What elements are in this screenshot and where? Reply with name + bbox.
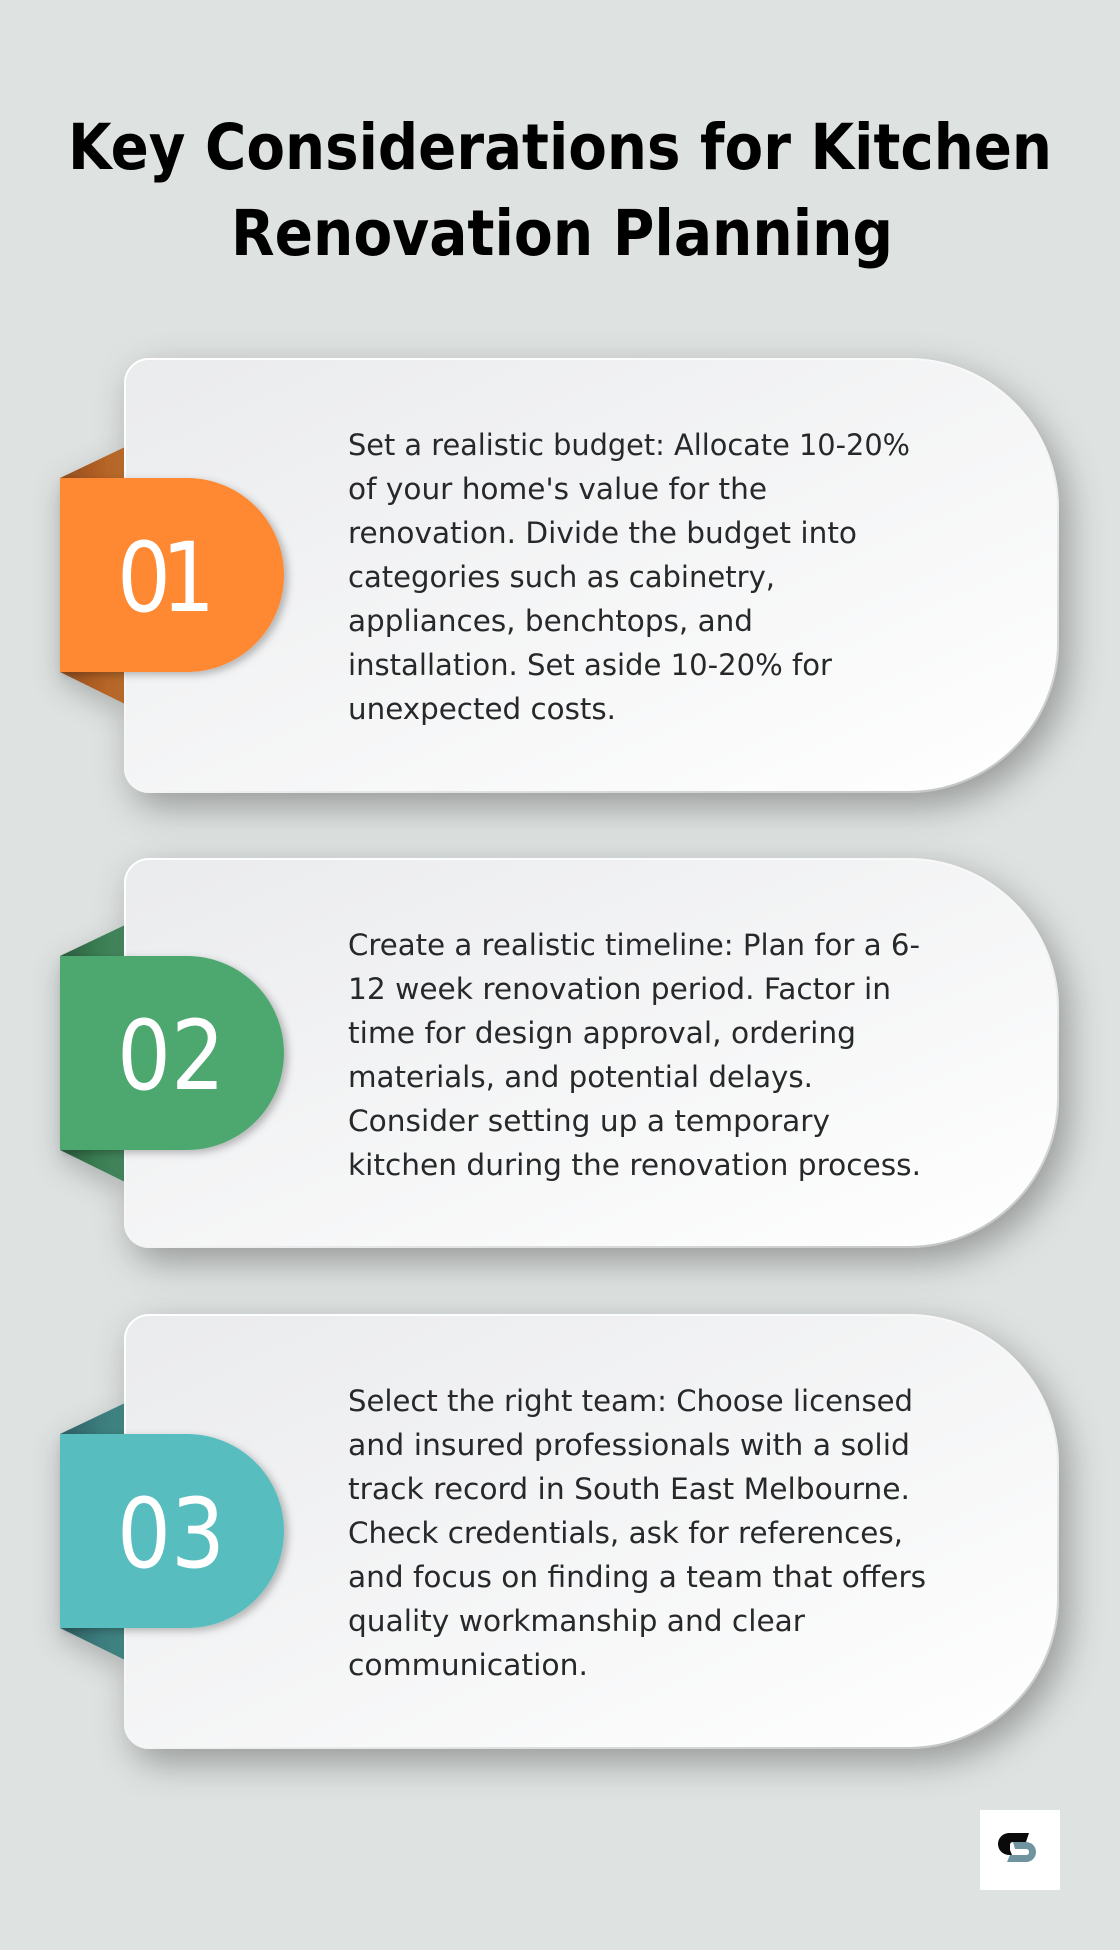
text: step 03: and focus on finding a team that offers <box>348 1560 926 1594</box>
text: step 03: communication. <box>348 1648 588 1682</box>
title: Renovation Planning <box>231 197 893 270</box>
text: step 01 <box>348 428 910 726</box>
badge: 01 <box>60 478 284 672</box>
text: step 03: Check credentials, ask for references, <box>348 1516 903 1550</box>
title <box>68 111 1052 270</box>
text: step 03: track record in South East Melbourne. <box>348 1472 910 1506</box>
text: step 01: unexpected costs. <box>348 692 616 726</box>
text: step 01: Set a realistic budget: Allocate 10-20% <box>348 428 910 462</box>
text: step 02: materials, and potential delays. <box>348 1060 813 1094</box>
fold: step 01 ribbon <box>60 447 125 704</box>
text: step 02: kitchen during the renovation process. <box>348 1148 921 1182</box>
text: step 02: Create a realistic timeline: Plan for a 6- <box>348 928 920 962</box>
text: step 03 <box>348 1384 926 1682</box>
text: step 02: 12 week renovation period. Factor in <box>348 972 891 1006</box>
text: step 03: quality workmanship and clear <box>348 1604 806 1638</box>
panel: step 03 team <box>60 1315 1058 1748</box>
badge: 02: 02 <box>117 1000 225 1112</box>
text: step 02: Consider setting up a temporary <box>348 1104 830 1138</box>
text: step 01: categories such as cabinetry, <box>348 560 775 594</box>
fold: step 03 ribbon <box>60 1403 125 1660</box>
panel: step 01 budget <box>60 359 1058 792</box>
card: step 01 <box>125 359 1058 792</box>
badge: 03 <box>60 1434 284 1628</box>
panel: step 02 timeline <box>60 859 1058 1247</box>
badge: 03: 03 <box>117 1478 225 1590</box>
text: step 02: time for design approval, ordering <box>348 1016 856 1050</box>
badge: 02 <box>60 956 284 1150</box>
card: step 02 <box>125 859 1058 1247</box>
text: step 02 <box>348 928 921 1182</box>
logo <box>980 1810 1060 1890</box>
text: step 03: and insured professionals with a solid <box>348 1428 910 1462</box>
badge: 01: 01 <box>117 523 215 634</box>
card: step 03 <box>125 1315 1058 1748</box>
text: step 03: Select the right team: Choose licensed <box>348 1384 913 1418</box>
text: step 01: renovation. Divide the budget into <box>348 516 857 550</box>
fold: step 02 ribbon <box>60 925 125 1182</box>
text: step 01: appliances, benchtops, and <box>348 604 753 638</box>
text: step 01: installation. Set aside 10-20% for <box>348 648 833 682</box>
text: step 01: of your home's value for the <box>348 472 767 506</box>
